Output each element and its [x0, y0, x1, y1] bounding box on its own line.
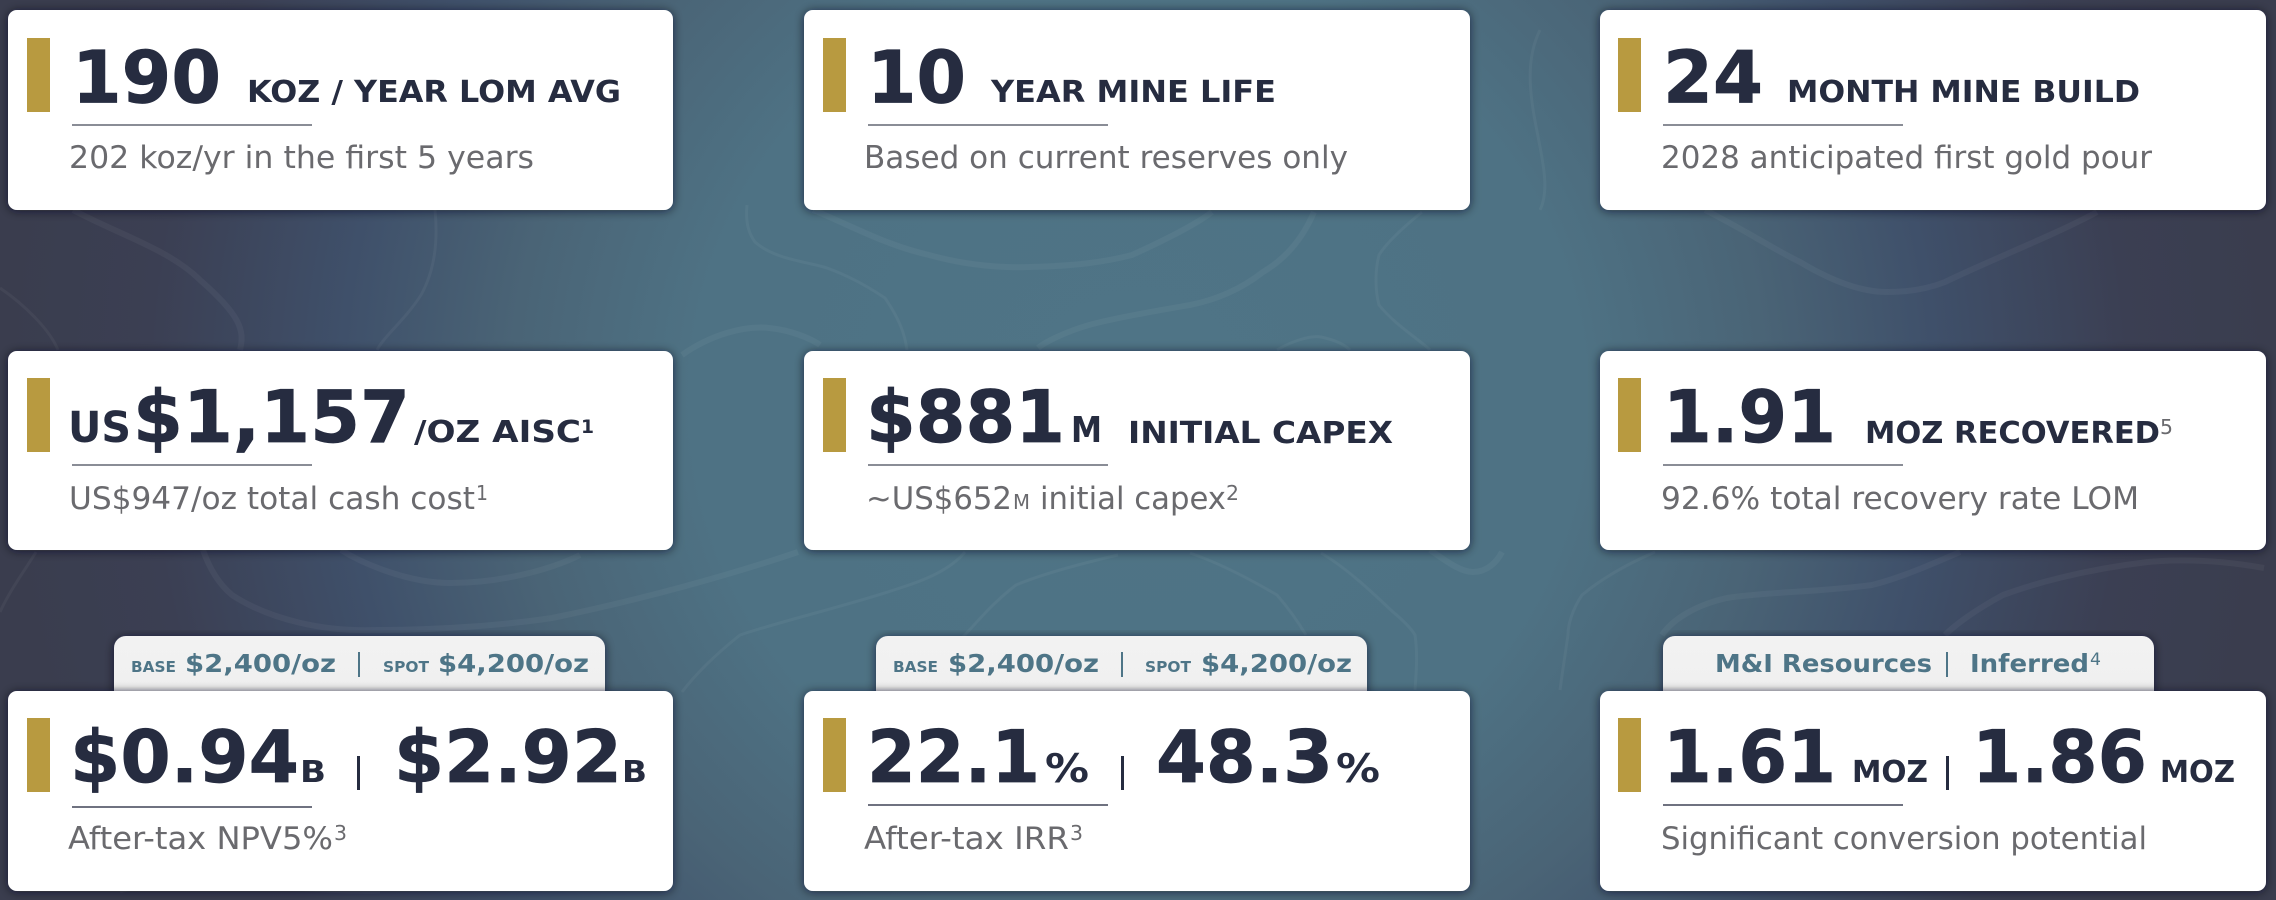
card: mine life: 10 — [867, 36, 966, 120]
tab: IRR gold price scenarios: BASE — [893, 658, 938, 676]
card: gold recovered: 92.6% total recovery rate LOM — [1661, 481, 2139, 517]
tab: resource categories: 4 — [2090, 650, 2101, 670]
card: IRR: After-tax IRR — [864, 821, 1069, 857]
tab: IRR gold price scenarios — [876, 636, 1367, 696]
card: AISC: US$947/oz total cash cost — [69, 481, 475, 517]
card: NPV: B — [300, 755, 326, 790]
card: gold recovered — [1600, 351, 2266, 550]
card: IRR: % — [1045, 747, 1089, 792]
card: IRR: 22.1 — [867, 715, 1040, 799]
tab: NPV gold price scenarios: $4,200/oz — [438, 649, 589, 678]
card: mine build: 2028 anticipated first gold pour — [1661, 140, 2152, 176]
card: AISC: /OZ AISC — [414, 415, 581, 450]
tab: NPV gold price scenarios: BASE — [131, 658, 176, 676]
card: AISC — [8, 351, 673, 550]
card: IRR: 3 — [1070, 821, 1083, 845]
card: resources: MOZ — [1852, 755, 1928, 790]
card: annual production — [8, 10, 673, 210]
card: initial capex — [804, 351, 1470, 550]
card: AISC: 1 — [581, 416, 594, 438]
card: NPV: B — [622, 755, 647, 790]
card: gold recovered: MOZ RECOVERED — [1865, 416, 2160, 451]
card: initial capex: $881 — [866, 375, 1065, 459]
card: resources — [1600, 691, 2266, 891]
card: resources: MOZ — [2160, 755, 2235, 790]
card: AISC: $1,157 — [133, 375, 410, 459]
tab: IRR gold price scenarios: SPOT — [1145, 658, 1191, 676]
card: initial capex: 2 — [1226, 481, 1239, 505]
card: initial capex: INITIAL CAPEX — [1128, 416, 1393, 451]
tab: resource categories — [1663, 636, 2154, 696]
card: gold recovered: 1.91 — [1663, 375, 1836, 459]
card: annual production: 202 koz/yr in the first 5 years — [69, 140, 534, 176]
card: gold recovered: 5 — [2160, 415, 2173, 439]
tab: NPV gold price scenarios: SPOT — [383, 658, 429, 676]
card: NPV: 3 — [334, 821, 347, 845]
card: initial capex: initial capex — [1040, 481, 1226, 517]
card: IRR: 48.3 — [1156, 715, 1333, 799]
card: resources: 1.61 — [1663, 715, 1836, 799]
card: initial capex: M — [1071, 410, 1102, 451]
card: NPV: $0.94 — [70, 715, 299, 799]
card: NPV: After-tax NPV5% — [68, 821, 333, 857]
card: NPV — [8, 691, 673, 891]
card: resources: Significant conversion potential — [1661, 821, 2147, 857]
card: mine build: 24 — [1663, 36, 1763, 120]
card: IRR: % — [1336, 747, 1380, 792]
card: initial capex: M — [1013, 490, 1030, 514]
tab: IRR gold price scenarios: $4,200/oz — [1201, 649, 1352, 678]
card: mine life — [804, 10, 1470, 210]
card: annual production: 190 — [72, 36, 221, 120]
card: resources: 1.86 — [1972, 715, 2147, 799]
card: IRR — [804, 691, 1470, 891]
card: mine build: MONTH MINE BUILD — [1787, 75, 2140, 110]
tab: resource categories: M&I Resources — [1715, 649, 1932, 678]
card: mine life: YEAR MINE LIFE — [990, 75, 1276, 110]
card: AISC: 1 — [476, 481, 488, 505]
card: NPV: $2.92 — [394, 715, 622, 799]
card: AISC: US — [68, 403, 131, 453]
tab: resource categories: Inferred — [1970, 649, 2089, 678]
card: mine build — [1600, 10, 2266, 210]
card: mine life: Based on current reserves only — [864, 140, 1348, 176]
tab: NPV gold price scenarios — [114, 636, 605, 696]
card: annual production: KOZ / YEAR LOM AVG — [247, 75, 621, 110]
tab: NPV gold price scenarios: $2,400/oz — [185, 649, 336, 678]
card: initial capex: ~US$652 — [866, 481, 1012, 517]
tab: IRR gold price scenarios: $2,400/oz — [948, 649, 1099, 678]
